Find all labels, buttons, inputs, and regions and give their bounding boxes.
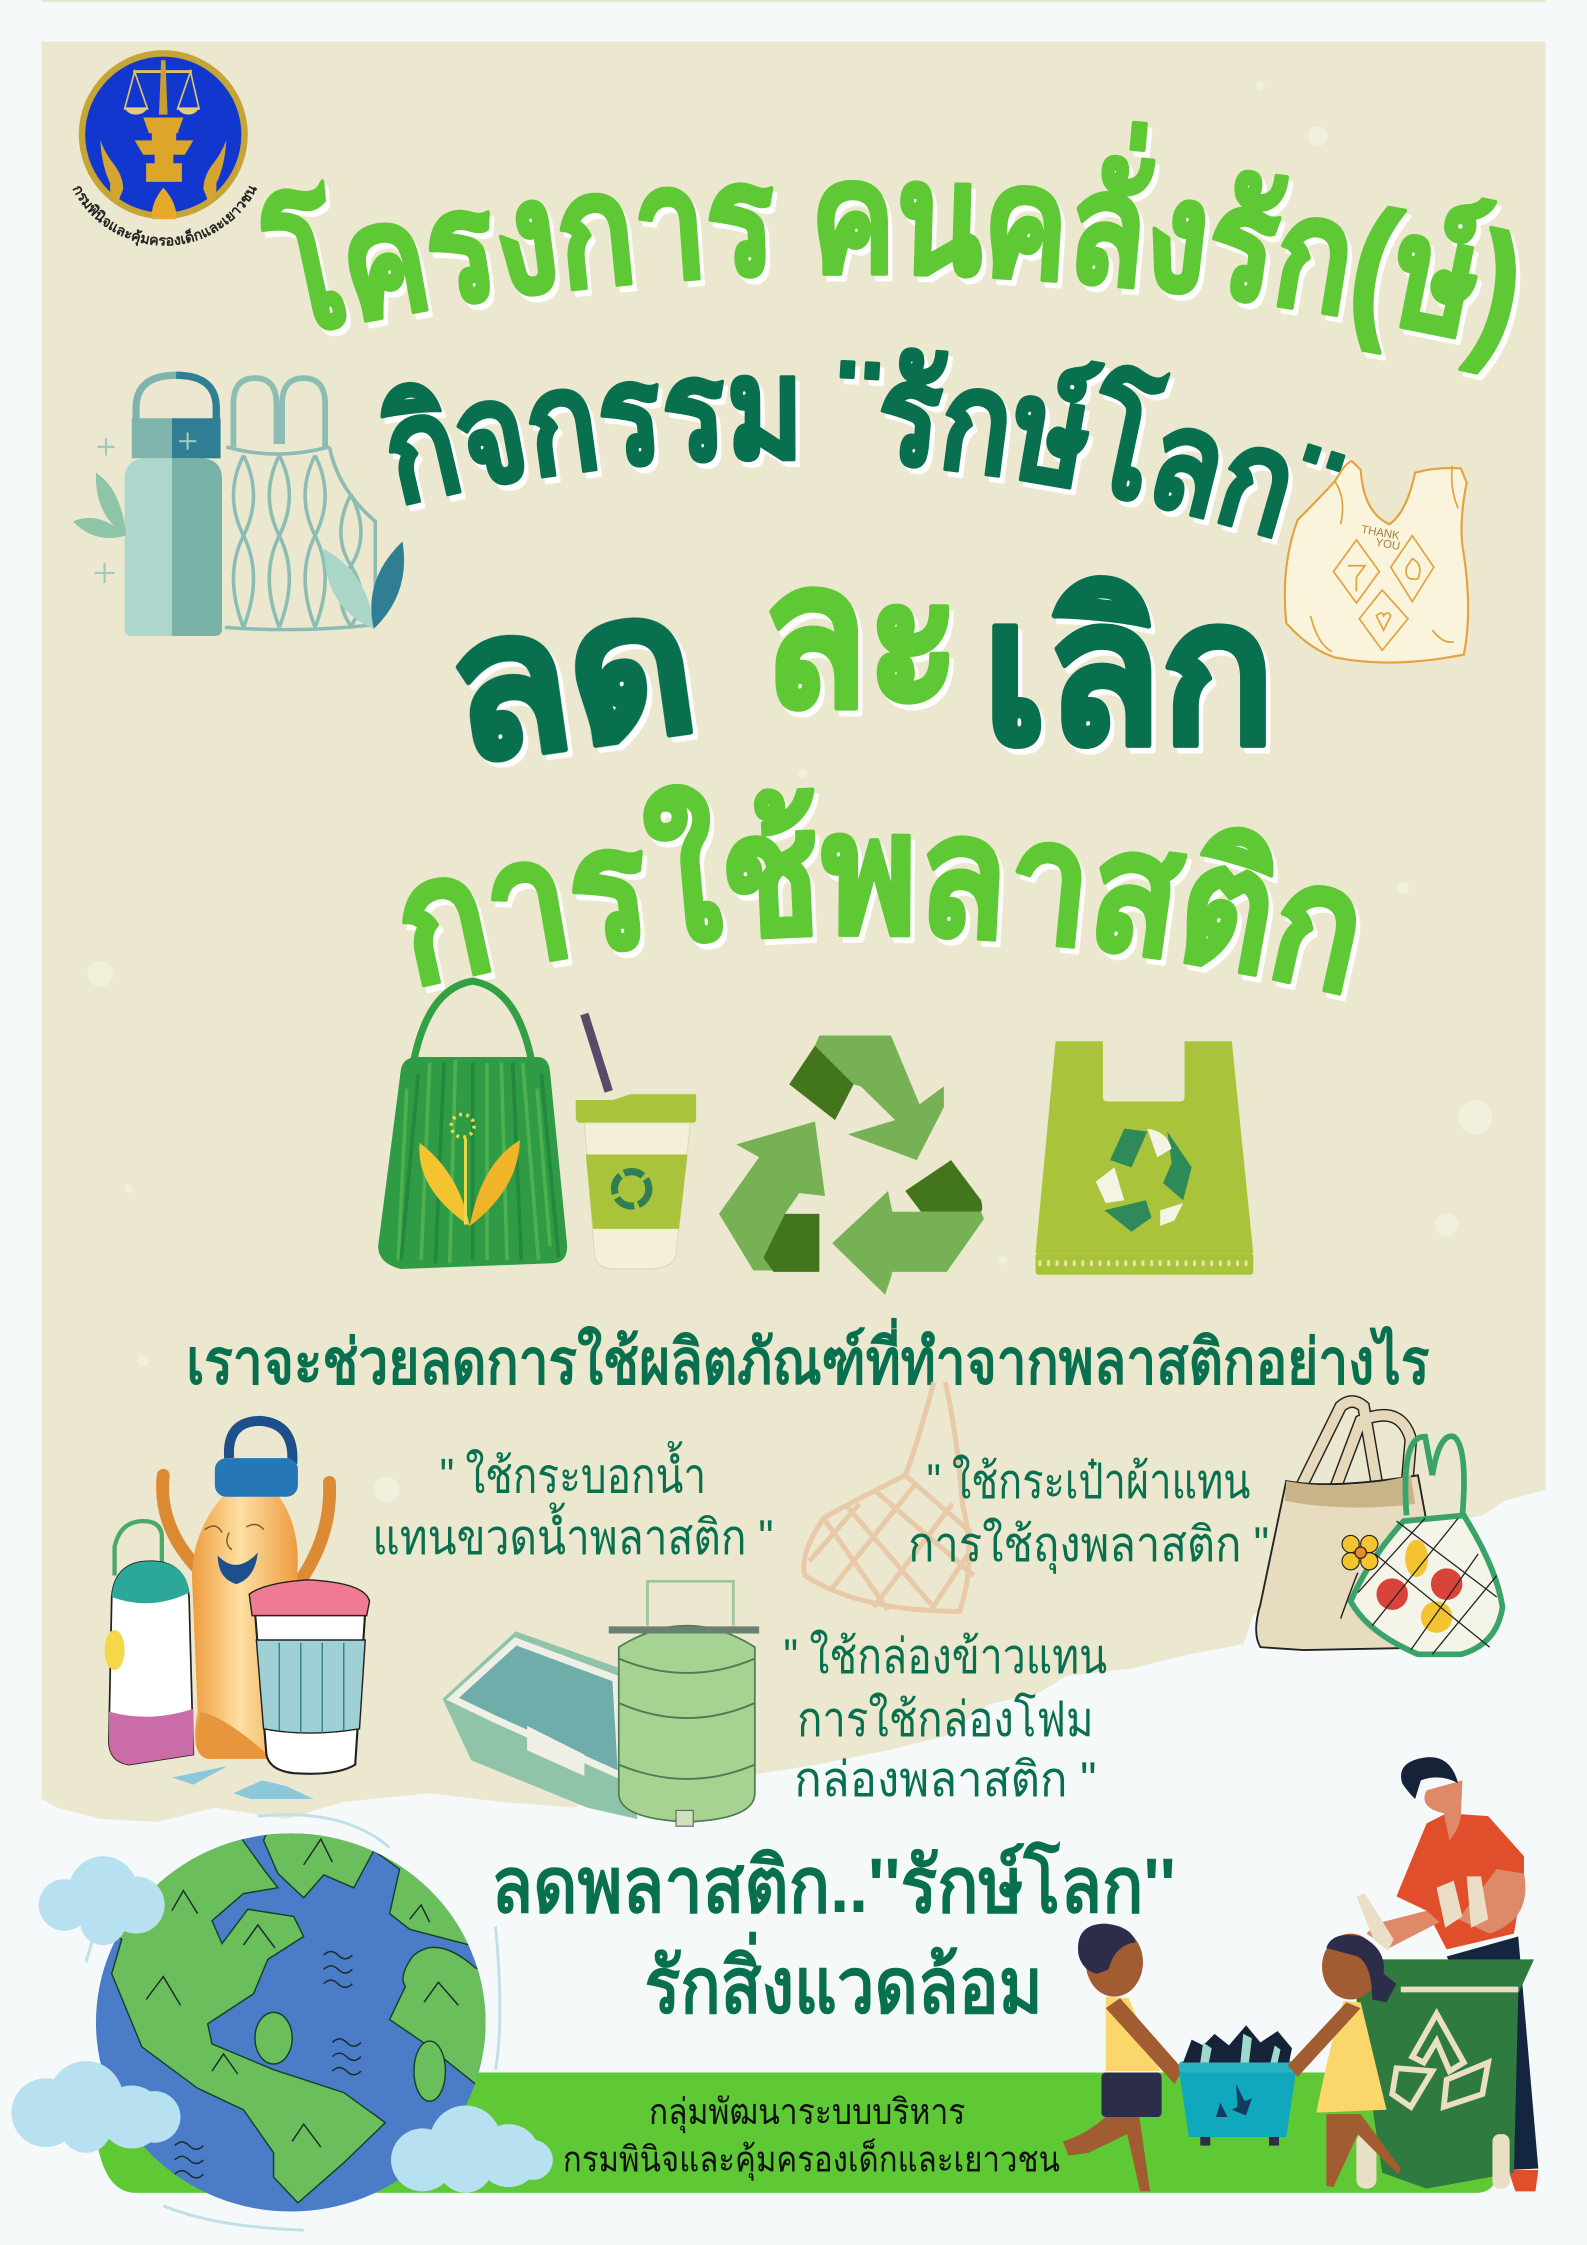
leaves <box>73 473 126 538</box>
mountains and waves <box>146 1839 458 2178</box>
flower <box>1342 1535 1378 1570</box>
closing slogan <box>491 1840 1176 2029</box>
clouds <box>11 1856 553 2193</box>
illustration: blue bottle bin <box>1179 2025 1296 2146</box>
cup <box>255 1611 365 1774</box>
callout: water bottle text <box>372 1440 773 1565</box>
bottle body <box>192 1490 298 1759</box>
footer credit <box>563 2092 1060 2180</box>
seal caption: กรมพินิจและคุ้มครองเด็กและเยาวชน <box>72 186 257 246</box>
continents <box>111 1833 486 2204</box>
footer credit: กรมพินิจและคุ้มครองเด็กและเยาวชน <box>563 2136 1060 2180</box>
closing slogan: ลดพลาสติก..''รักษ์โลก'' <box>491 1840 1176 1929</box>
golden pedestal <box>135 117 193 182</box>
arms <box>163 1475 330 1590</box>
illustration: tote and net bag <box>1256 1402 1502 1654</box>
title: line 1: โครงการ คนคลั่งรัก(ษ์) <box>260 120 1520 380</box>
illustration: earth <box>86 1815 500 2230</box>
net bag <box>225 378 375 630</box>
callout: cloth bag text: " ใช้กระเป๋าผ้าแทน <box>927 1454 1250 1509</box>
bag caption: THANK <box>1360 524 1401 543</box>
illustration: bottle character, flask and cup <box>105 1421 370 1799</box>
panel: beige torn paper <box>42 42 1545 1822</box>
blue cap and handle <box>229 1421 292 1464</box>
illustration: tiffin carrier <box>609 1581 759 1826</box>
callout: water bottle text: " ใช้กระบอกน้ำ <box>440 1440 706 1503</box>
splash <box>172 1766 314 1799</box>
scales of justice <box>125 72 199 109</box>
face <box>218 1553 258 1584</box>
closing slogan: รักสิ่งแวดล้อม <box>645 1931 1043 2029</box>
illustration: lunch box <box>443 1631 637 1819</box>
illustration: recycling bin <box>1356 1959 1534 2189</box>
callout: lunch box text: การใช้กล่องโฟม <box>797 1692 1094 1747</box>
callout: cloth bag text: การใช้ถุงพลาสติก " <box>908 1517 1269 1574</box>
flask <box>115 1521 162 1576</box>
naga figures <box>100 140 123 203</box>
icon: reusable bottle and net bag <box>73 375 404 636</box>
bag recycle mark <box>1096 1129 1192 1232</box>
icon: cup with straw <box>576 1014 696 1269</box>
icon: thank you plastic bag: YOU <box>1374 537 1401 553</box>
illustration: right child <box>1288 1934 1401 2187</box>
bottle handle <box>136 375 216 427</box>
callout: water bottle text: แทนขวดน้ำพลาสติก " <box>372 1502 773 1565</box>
icon: plastic bag with recycle mark <box>1036 1041 1253 1275</box>
illustration: left child <box>1063 1924 1183 2191</box>
illustration: net bag tan <box>804 1382 974 1611</box>
green ground bar <box>96 2073 1497 2193</box>
callout: cloth bag text <box>908 1454 1269 1574</box>
callout: lunch box text: กล่องพลาสติก " <box>794 1753 1096 1807</box>
title: ลด: ลด <box>435 548 708 803</box>
icon: green cloth bag <box>378 981 567 1269</box>
title: ละ: ละ <box>762 524 960 748</box>
logo: department seal <box>72 50 257 246</box>
icon: big recycle symbol <box>719 1036 984 1295</box>
icon: thank you plastic bag <box>1285 461 1468 663</box>
illustration: man with bottles <box>1356 1757 1538 2191</box>
title: line 4: การใช้พลาสติก <box>402 784 1360 1002</box>
title: เลิก: เลิก <box>983 561 1275 785</box>
footer credit: กลุ่มพัฒนาระบบบริหาร <box>649 2092 965 2133</box>
callout: lunch box text: " ใช้กล่องข้าวแทน <box>783 1629 1107 1684</box>
callout: lunch box text <box>783 1629 1107 1807</box>
bin recycle mark <box>1392 2014 1488 2107</box>
title: line 2: กิจกรรม ¨รักษ์โลก¨ <box>380 347 1350 545</box>
